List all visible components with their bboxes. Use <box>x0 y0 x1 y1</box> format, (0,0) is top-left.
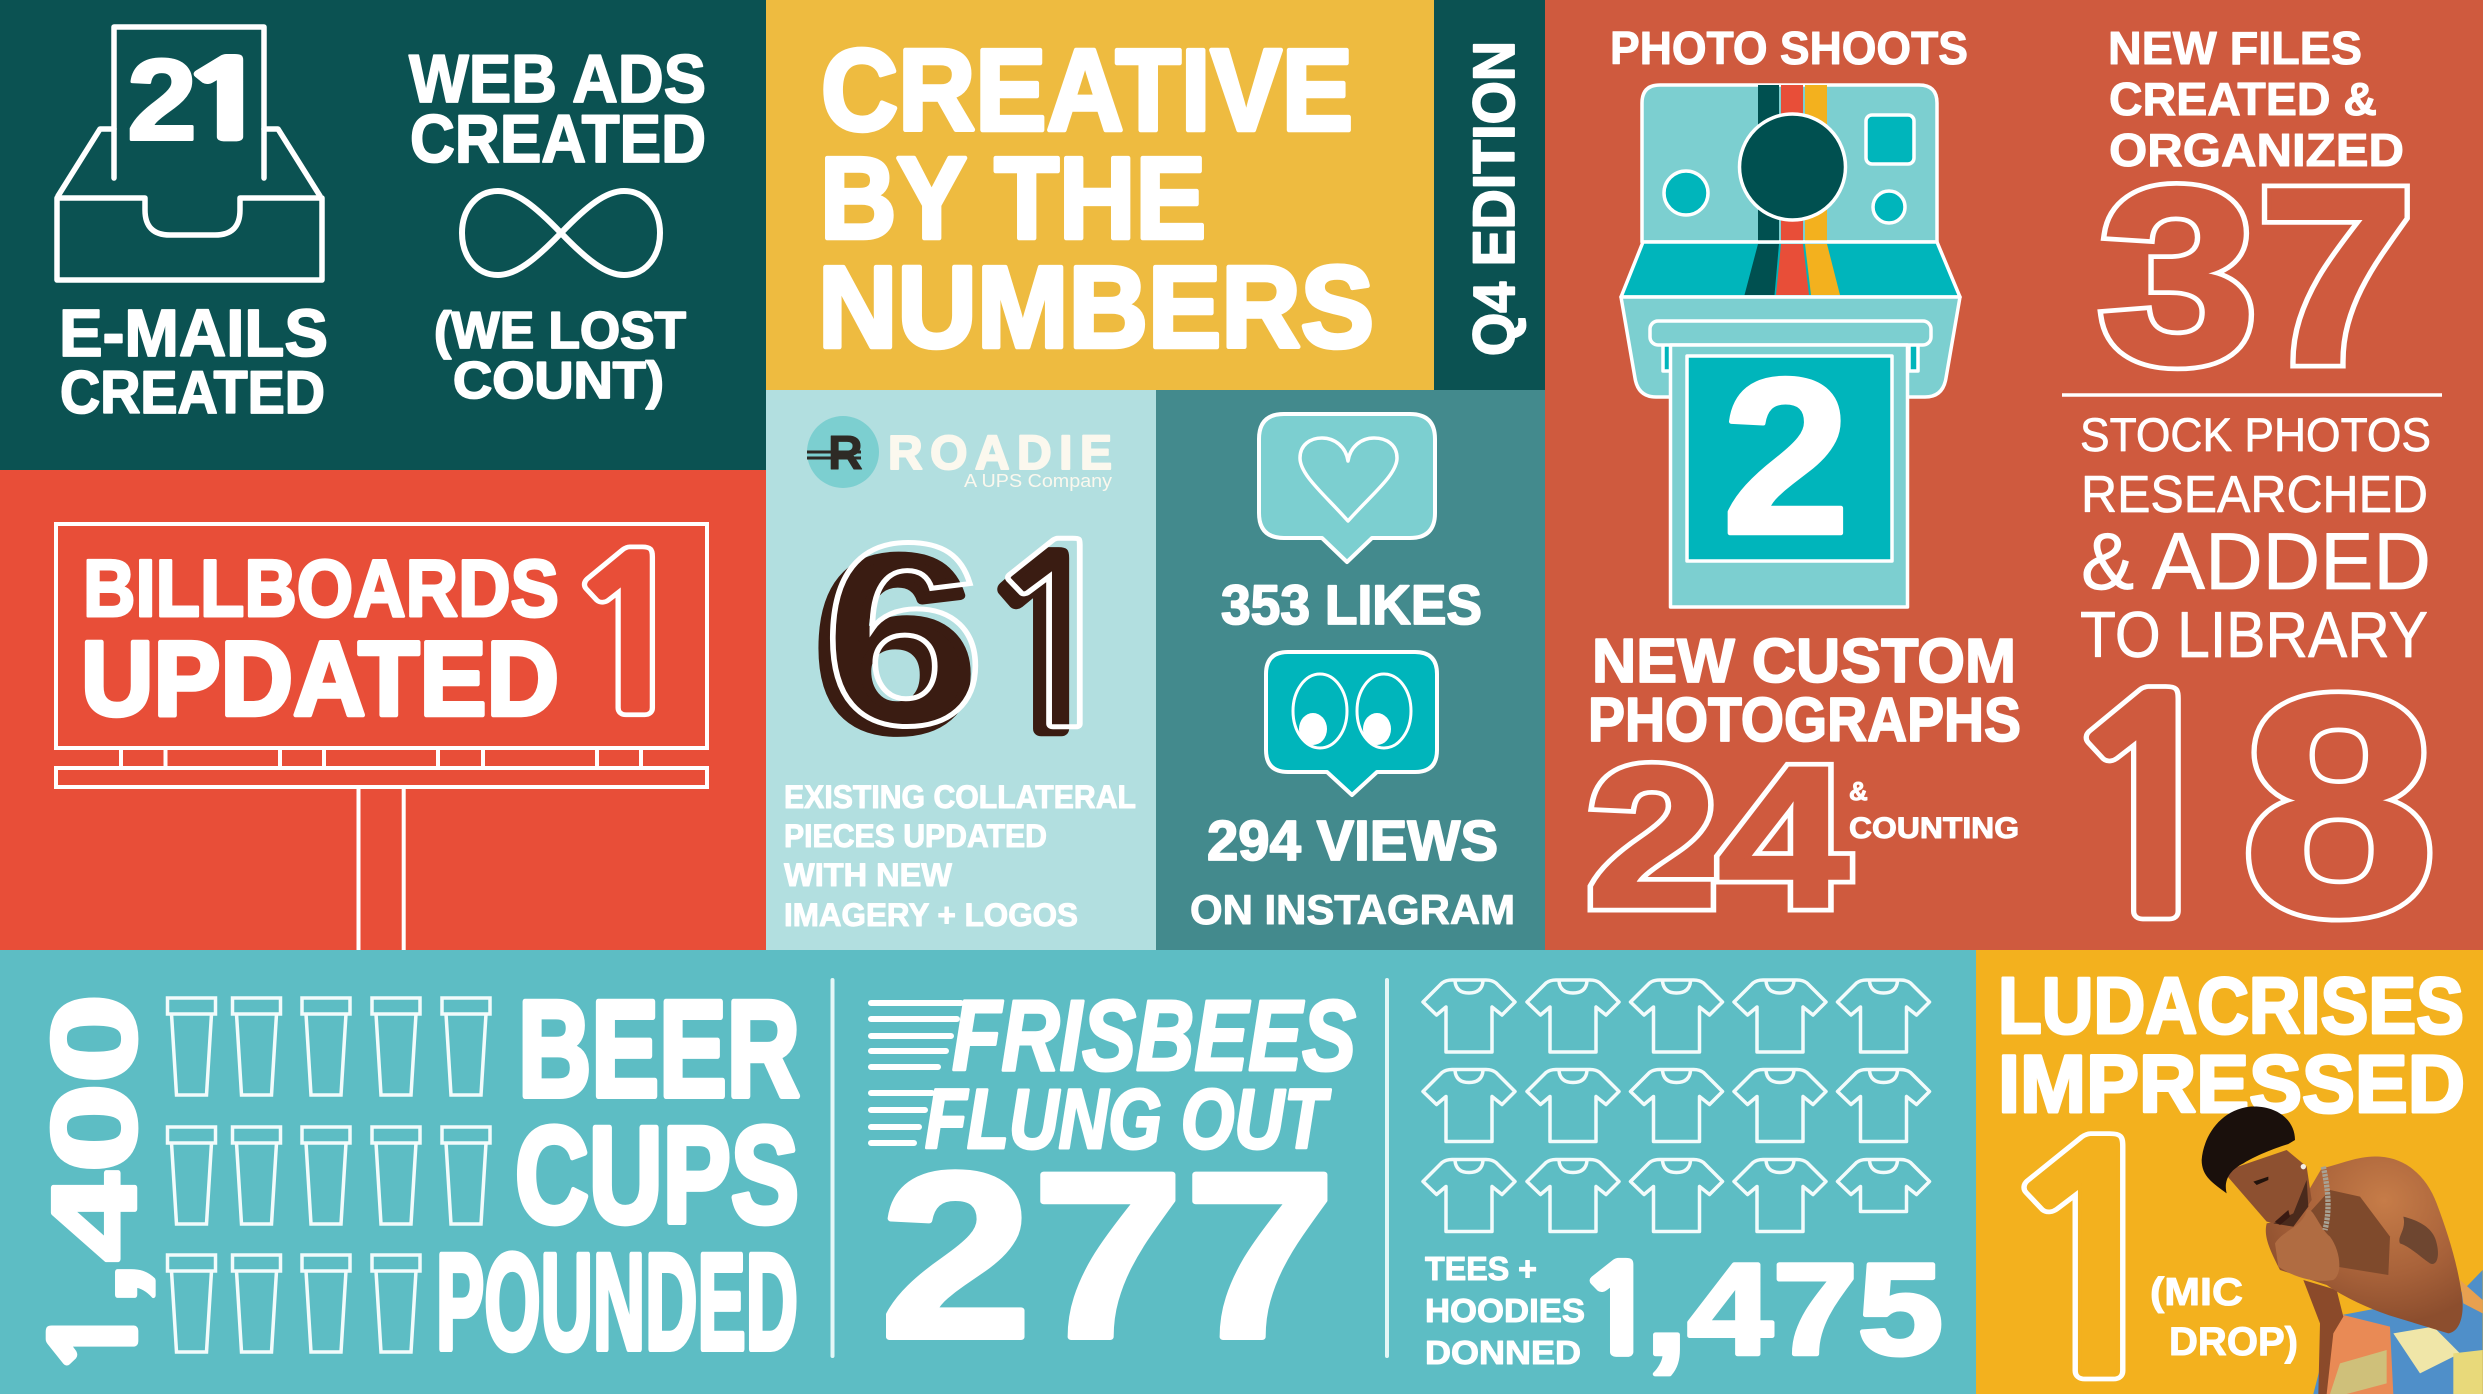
icon: heart bubble <box>1259 414 1435 562</box>
panel: Instagram <box>1156 390 1545 950</box>
stat: 1,400 rotated: 1 <box>39 1299 152 1379</box>
label: new files created and organized: NEW FILES <box>2108 22 2362 74</box>
label: we lost count: COUNT) <box>453 352 664 410</box>
label: stock photos researched and added to library: STOCK PHOTOS <box>2080 408 2431 461</box>
stat: 18 outlined <box>2048 631 2436 979</box>
stat: 61 <box>813 490 1145 783</box>
stat: 61: 1 <box>971 517 1145 763</box>
icon: eyes bubble <box>1266 652 1437 795</box>
label: tees and hoodies donned: HOODIES <box>1425 1292 1585 1329</box>
stat: 18 outlined: 8 <box>2242 631 2436 979</box>
label: & counting: COUNTING <box>1849 812 2019 845</box>
stat: 61: 6 <box>822 490 986 780</box>
title: creative by the numbers <box>818 25 1374 372</box>
label: tees and hoodies donned <box>1425 1250 1585 1371</box>
text: existing collateral: EXISTING COLLATERAL <box>784 779 1136 815</box>
label: e-mails created <box>59 296 328 426</box>
label: stock photos researched and added to library <box>2080 408 2431 671</box>
label: e-mails created: E-MAILS <box>59 296 328 371</box>
icons: tee shirts <box>1423 980 1930 1232</box>
stat: 18 outlined: 1 <box>2048 666 2248 958</box>
icon: instant camera <box>1621 85 1960 607</box>
stat: 2: 2 <box>1722 333 1850 581</box>
stat: 1 outlined: 1 <box>559 534 701 742</box>
label: stock photos researched and added to library: & ADDED <box>2081 517 2431 607</box>
label: e-mails created: CREATED <box>60 359 325 426</box>
stat: 37 outlined: 37 <box>2099 136 2415 415</box>
label: 294 views: 294 VIEWS <box>1207 809 1498 873</box>
label: web ads created: CREATED <box>410 101 706 177</box>
label: new custom photographs: PHOTOGRAPHS <box>1588 686 2021 755</box>
label: mic drop <box>2150 1271 2298 1364</box>
panel: Ludacrises <box>1976 950 2483 1394</box>
label: & counting <box>1849 776 2019 845</box>
label: we lost count <box>434 302 686 410</box>
stat: 61: 1 <box>970 533 1121 767</box>
heading: photo shoots: PHOTO SHOOTS <box>1610 22 1968 74</box>
stat: 1,475: 1 <box>1576 1252 1662 1372</box>
label: beer cups pounded: CUPS <box>515 1099 799 1252</box>
panel: Q4 edition <box>1434 0 1545 390</box>
label: billboards updated: BILLBOARDS <box>83 544 559 634</box>
label: tees and hoodies donned: DONNED <box>1425 1334 1581 1371</box>
logo: Roadie: R <box>828 427 863 480</box>
label: we lost count: (WE LOST <box>434 302 686 360</box>
label: tees and hoodies donned: TEES + <box>1425 1250 1537 1287</box>
stat: 21: 1 <box>177 48 275 154</box>
label: new files created and organized: ORGANIZED <box>2109 124 2404 176</box>
label: new files created and organized: CREATED & <box>2109 73 2377 125</box>
title: creative by the numbers: NUMBERS <box>818 242 1374 372</box>
text: existing collateral: IMAGERY + LOGOS <box>784 897 1078 933</box>
label: billboards updated: UPDATED <box>81 620 559 738</box>
label: web ads created: WEB ADS <box>409 41 706 117</box>
title: creative by the numbers: CREATIVE <box>821 25 1353 155</box>
stat: 1,400 rotated: ,400 <box>28 994 161 1306</box>
icons: beer cups <box>168 998 490 1352</box>
heading: Q4 edition: Q4 EDITION <box>1462 41 1527 356</box>
icon: billboard <box>56 524 707 950</box>
stat: 21: 2 <box>127 36 197 164</box>
label: web ads created <box>409 41 706 177</box>
panel: billboards <box>0 470 767 950</box>
label: frisbees flung out: FLUNG OUT <box>925 1072 1331 1166</box>
label: beer cups pounded: POUNDED <box>436 1226 798 1379</box>
icon: inbox tray <box>57 27 322 280</box>
logo: Roadie <box>807 416 1112 491</box>
stat: 24 outlined: 24 <box>1587 726 1849 949</box>
panel: photo and files <box>1545 0 2483 979</box>
photo: man posing (illustrated) <box>2202 1107 2483 1394</box>
panel: Roadie collateral <box>766 390 1156 950</box>
label: on instagram: ON INSTAGRAM <box>1190 886 1515 933</box>
label: billboards updated <box>81 544 559 738</box>
logo: Roadie: A UPS Company <box>964 471 1112 491</box>
icon: infinity <box>462 191 660 275</box>
panel: emails and web ads <box>0 0 767 470</box>
label: 353 likes: 353 LIKES <box>1221 573 1482 636</box>
label: beer cups pounded: BEER <box>518 973 800 1126</box>
logo: Roadie: ROADIE <box>888 427 1112 480</box>
label: beer cups pounded <box>436 973 800 1379</box>
stat: 18 outlined: 1 <box>2048 666 2248 958</box>
stat: 37 outlined: 37 <box>2099 136 2415 415</box>
label: new files created and organized <box>2108 22 2404 176</box>
stat: 1,475: ,475 <box>1645 1236 1943 1382</box>
stat: 277: 277 <box>880 1124 1336 1388</box>
label: & counting: & <box>1849 776 1868 806</box>
stat: 24 outlined: 24 <box>1587 726 1849 949</box>
icon: speed lines <box>871 1003 961 1143</box>
heading: Ludacrises impressed: IMPRESSED <box>1998 1039 2465 1130</box>
panel: title <box>766 0 1435 390</box>
heading: Ludacrises impressed <box>1998 961 2465 1130</box>
text: existing collateral: WITH NEW <box>784 857 953 893</box>
label: frisbees flung out <box>925 980 1356 1166</box>
text: existing collateral: PIECES UPDATED <box>784 818 1047 854</box>
stat: 61: 6 <box>813 505 976 783</box>
label: frisbees flung out: FRISBEES <box>952 980 1356 1092</box>
label: stock photos researched and added to library: RESEARCHED <box>2081 466 2428 524</box>
label: new custom photographs <box>1588 627 2021 755</box>
label: mic drop: (MIC <box>2150 1271 2243 1314</box>
stat: 1 outlined: 1 <box>559 534 701 742</box>
label: new custom photographs: NEW CUSTOM <box>1592 627 2016 696</box>
label: mic drop: DROP) <box>2169 1320 2298 1364</box>
text: existing collateral <box>784 779 1136 933</box>
label: stock photos researched and added to library: TO LIBRARY <box>2080 598 2428 671</box>
title: creative by the numbers: BY THE <box>820 133 1206 263</box>
panel: bottom teal stats <box>0 950 1976 1394</box>
stat: 18 outlined: 8 <box>2242 631 2436 979</box>
